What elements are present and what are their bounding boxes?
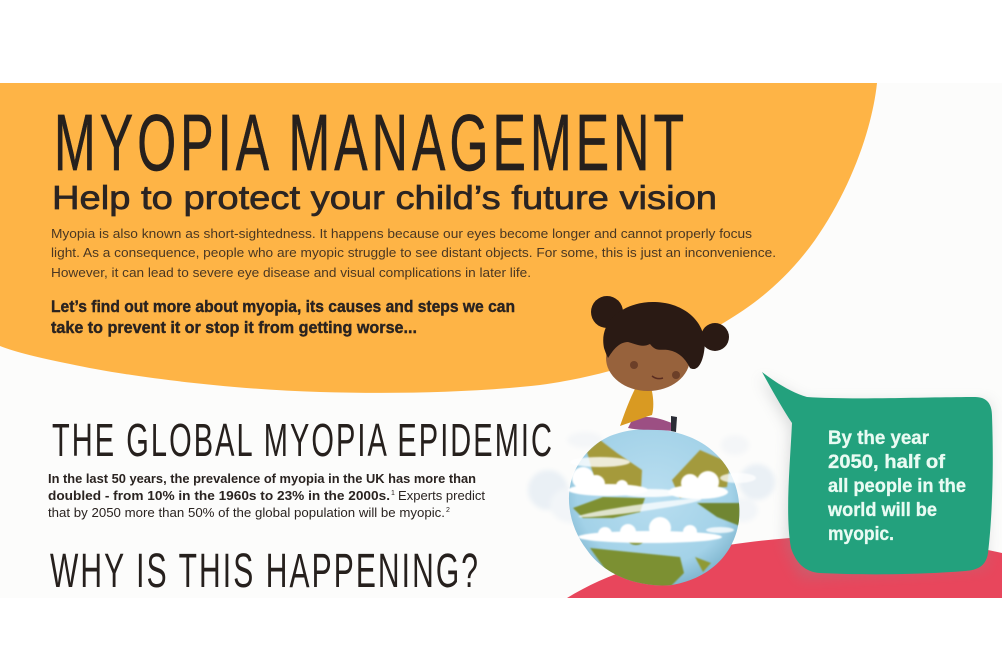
intro paragraph <box>51 226 776 280</box>
epidemic paragraph: In the last 50 years, the prevalence of myopia in the UK has more than <box>48 471 476 486</box>
epidemic paragraph <box>48 471 485 520</box>
paper background band <box>0 83 1002 598</box>
torso <box>620 384 653 426</box>
epidemic paragraph: Experts predict <box>398 488 485 503</box>
call to action text: take to prevent it or stop it from getting worse... <box>51 318 417 337</box>
intro paragraph: Myopia is also known as short-sightedness. It happens because our eyes become longer and cannot properly focus <box>51 226 753 241</box>
heading: why is this happening: WHY IS THIS HAPPENING? <box>50 545 478 598</box>
outer cloud halo <box>528 432 775 523</box>
bubble text: 2050, half of <box>828 452 946 473</box>
bubble text: world will be <box>827 500 937 521</box>
bubble text <box>827 428 966 545</box>
bubble text: all people in the <box>828 476 966 497</box>
shoe <box>671 416 677 432</box>
continents <box>573 440 740 590</box>
illustration: globe with clouds <box>528 429 775 590</box>
epidemic paragraph: that by 2050 more than 50% of the global population will be myopic. <box>48 505 445 520</box>
illustration: girl sitting on globe <box>591 296 729 432</box>
intro paragraph: light. As a consequence, people who are myopic struggle to see distant objects. For some, this is just an inconvenience. <box>51 245 776 260</box>
globe sphere <box>569 429 739 585</box>
bubble text: myopic. <box>828 524 894 545</box>
heading: the global myopia epidemic: THE GLOBAL MYOPIA EPIDEMIC <box>52 415 552 467</box>
hair <box>603 302 705 369</box>
cloud bands <box>568 457 756 543</box>
orange header shape <box>0 83 877 393</box>
cheeks and eyes <box>630 361 680 379</box>
title: MYOPIA MANAGEMENT <box>54 99 684 188</box>
green speech bubble <box>762 372 993 574</box>
epidemic paragraph: 1 <box>391 490 395 497</box>
epidemic paragraph: doubled - from 10% in the 1960s to 23% in the 2000s. <box>48 488 390 503</box>
call to action text: Let’s find out more about myopia, its causes and steps we can <box>51 297 515 316</box>
call to action text <box>51 297 515 337</box>
right hair bun <box>701 323 729 351</box>
left hair bun <box>591 296 623 328</box>
speech bubble shadow <box>760 377 990 578</box>
subtitle: Help to protect your child’s future vision <box>52 179 717 216</box>
epidemic paragraph: 2 <box>446 507 450 514</box>
face <box>606 325 690 391</box>
bubble text: By the year <box>828 428 930 449</box>
red curved shape <box>567 537 1002 598</box>
legs <box>628 417 674 431</box>
intro paragraph: However, it can lead to severe eye disease and visual complications in later life. <box>51 265 531 280</box>
